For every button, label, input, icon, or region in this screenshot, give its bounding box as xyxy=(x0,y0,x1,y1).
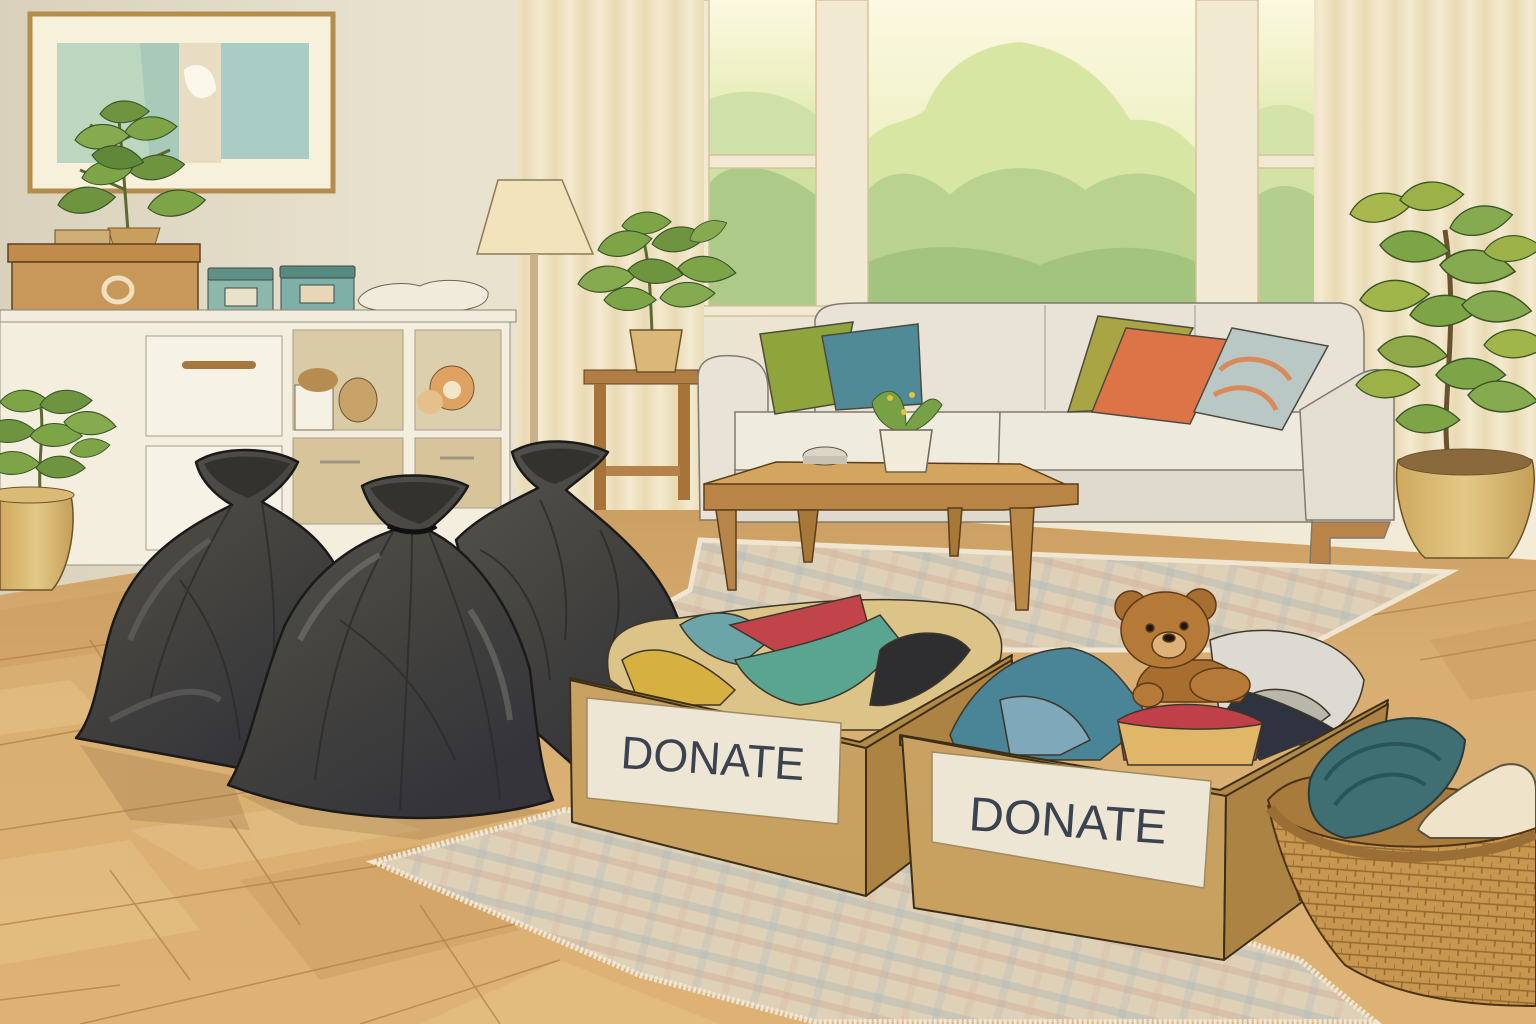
box label: DONATE xyxy=(619,726,806,790)
curtains xyxy=(518,0,1536,510)
tray on coffee table xyxy=(803,447,847,465)
donate box left xyxy=(570,655,1012,896)
table plant xyxy=(872,391,942,472)
floor lamp xyxy=(477,180,593,454)
wicker basket xyxy=(1268,718,1536,1006)
framed art xyxy=(30,14,333,191)
donate box right: contents xyxy=(950,630,1364,760)
floor shadows under bags xyxy=(80,745,550,840)
floor xyxy=(0,505,1536,1024)
storage boxes on sideboard xyxy=(8,230,488,322)
tan pouch xyxy=(1118,704,1262,765)
box label: DONATE xyxy=(967,788,1168,855)
wall xyxy=(0,0,1536,600)
donate box left: clothes xyxy=(608,595,1002,730)
cushion: patterned xyxy=(1194,328,1328,430)
sideboard xyxy=(0,310,516,565)
cushion: coral xyxy=(1092,328,1230,424)
sideboard plant xyxy=(56,100,207,248)
rolled teal blanket xyxy=(1309,718,1465,838)
window xyxy=(700,0,1330,316)
cushion: teal xyxy=(822,324,922,410)
left floor plant xyxy=(0,388,117,590)
garbage bag: back right xyxy=(456,441,680,780)
trees outside xyxy=(708,42,1320,308)
coffee table xyxy=(704,462,1078,610)
back rug xyxy=(600,540,1450,680)
sofa xyxy=(698,303,1394,564)
teddy bear xyxy=(1115,589,1250,707)
rolled cream blanket xyxy=(1418,764,1536,838)
window frames xyxy=(700,0,1330,316)
cushion: olive xyxy=(760,322,853,414)
front rug xyxy=(375,810,1375,1022)
sofa cushions xyxy=(760,316,1328,430)
side table xyxy=(584,370,698,510)
cushion: yellow-green xyxy=(1068,316,1193,412)
side table plant xyxy=(576,210,737,372)
box label xyxy=(587,698,841,824)
garbage bag: back left xyxy=(76,450,340,770)
donate box right xyxy=(900,700,1388,960)
right floor plant xyxy=(1347,179,1536,558)
box label xyxy=(932,752,1211,888)
garbage bag: front xyxy=(228,476,553,818)
